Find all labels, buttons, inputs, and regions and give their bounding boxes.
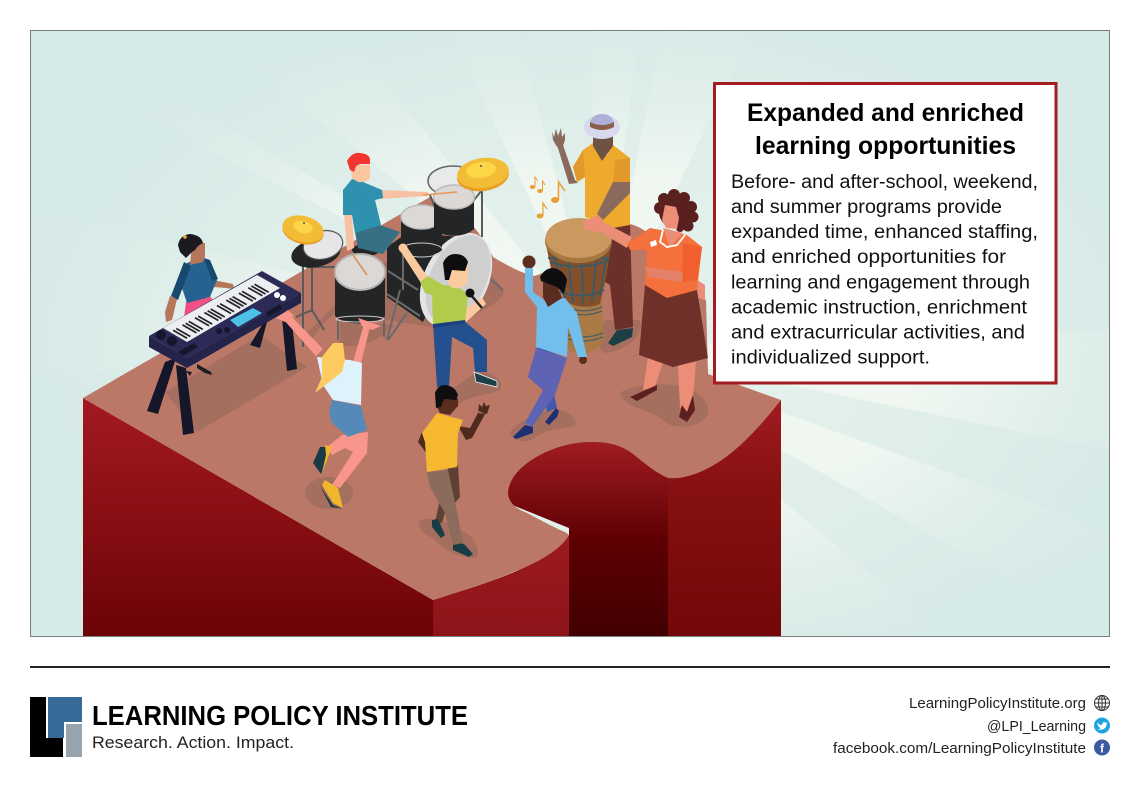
panel body text: academic instruction, enrichment [731, 298, 1028, 318]
front leg [525, 348, 567, 427]
hand [579, 356, 587, 364]
logo: Learning Policy Institute [30, 697, 468, 757]
hat band [590, 122, 614, 130]
back tom drum [428, 166, 478, 196]
hair [315, 343, 345, 393]
shirt [317, 357, 362, 405]
playing arm [597, 182, 630, 220]
bass drum head [405, 221, 507, 339]
stool [352, 244, 380, 256]
shirt [422, 413, 463, 472]
left cymbal [279, 211, 327, 249]
djembe drum [545, 218, 612, 354]
keyboard legs [147, 313, 297, 435]
shadow: dancing woman [305, 477, 353, 509]
face [190, 243, 205, 265]
back leg [435, 465, 460, 523]
scene frame [30, 30, 1110, 636]
hair [347, 153, 370, 172]
website: LearningPolicyInstitute.org [909, 695, 1086, 712]
keyboard player [165, 234, 234, 376]
shoes [432, 519, 473, 557]
landing shoe [320, 480, 343, 509]
platform top surface [83, 197, 781, 600]
music notes [530, 177, 565, 218]
drum stem [568, 300, 604, 354]
legs [327, 432, 368, 488]
panel body text: learning and engagement through [731, 272, 1030, 294]
hand [398, 244, 408, 252]
necklace [660, 230, 685, 247]
panel body text: and extracurricular activities, and [731, 322, 1025, 344]
snare drum [335, 254, 385, 340]
back notch [697, 352, 708, 374]
right arm [458, 402, 490, 440]
face [350, 165, 370, 182]
dancing woman [276, 310, 381, 509]
face [662, 205, 679, 229]
skirt [639, 285, 708, 367]
forearm [462, 297, 486, 322]
dials [156, 304, 282, 356]
singer [398, 244, 497, 387]
drummer [343, 153, 457, 256]
hair [178, 234, 203, 258]
left wall [83, 398, 433, 637]
scene panel: stage illustration background with light rays [0, 5, 1120, 642]
panel heading [747, 99, 1024, 160]
hand [552, 128, 565, 147]
icon: facebook: f [1100, 742, 1105, 756]
dancer in yellow shirt [418, 385, 490, 557]
shadow: drummer standing [599, 320, 641, 353]
hair [435, 385, 458, 408]
icon: globe [1094, 696, 1110, 710]
pants [355, 225, 400, 254]
keyboard top [149, 271, 301, 358]
pants [602, 224, 633, 330]
icon: facebook [1094, 740, 1110, 756]
bowl cords [548, 258, 609, 305]
panel body text: and summer programs provide [731, 197, 1002, 218]
logo mark [30, 697, 82, 757]
shoes [630, 385, 695, 422]
middle wall [433, 535, 569, 637]
face [543, 282, 562, 307]
drummer man [552, 114, 633, 346]
skirt [329, 400, 367, 437]
right forearm [213, 280, 234, 289]
teacher [583, 189, 708, 422]
extended arm [583, 215, 632, 248]
shadow: keyboard [165, 335, 307, 432]
drum kit [279, 155, 511, 347]
facebook page: facebook.com/LearningPolicyInstitute [833, 740, 1086, 757]
right cymbal stand [430, 188, 482, 237]
skirt [183, 297, 220, 325]
shirt [525, 268, 587, 357]
callout panel: expanded and enriched learning opportunities [714, 84, 1056, 383]
face [437, 398, 458, 415]
shadow: yellow shirt dancer [419, 519, 478, 558]
knobs [274, 292, 280, 298]
shadow: blue shirt dancer [510, 410, 576, 441]
footer rule [30, 666, 1110, 668]
shadow: singer [440, 372, 501, 408]
white keys [163, 275, 280, 342]
notch interior [500, 435, 668, 637]
icon: twitter [1094, 718, 1110, 734]
shoe [474, 372, 497, 387]
panel body text [731, 172, 1038, 368]
panel heading: Expanded and enriched [747, 99, 1024, 127]
hair [443, 254, 468, 280]
platform: red puzzle piece block [83, 197, 781, 637]
hands [276, 310, 381, 330]
note one [530, 177, 538, 189]
drum head [545, 218, 612, 263]
arms [283, 314, 370, 363]
belt [433, 320, 465, 328]
left forearm [165, 296, 177, 322]
left arm [418, 432, 444, 461]
bass drum shell [387, 233, 463, 322]
neck [663, 228, 683, 247]
sleeves [171, 258, 218, 300]
arm behind [693, 277, 705, 300]
shirt [573, 143, 630, 228]
sleeve [682, 243, 702, 282]
twitter handle: @LPI_Learning [987, 718, 1086, 735]
right tom drum [434, 185, 474, 236]
hair [540, 268, 567, 294]
left tom drum [289, 227, 346, 272]
panel body text: individualized support. [731, 348, 930, 368]
name tag [650, 240, 657, 247]
panel body text: Before- and after-school, weekend, [731, 172, 1038, 193]
keyboard side [149, 293, 301, 368]
shoes [513, 408, 559, 439]
shoe [608, 328, 633, 346]
note two [537, 181, 545, 193]
sleeve [573, 150, 630, 182]
right cymbal [455, 155, 511, 194]
mid tom drum [400, 205, 442, 257]
microphone [466, 288, 482, 308]
blouse [627, 228, 702, 298]
fist [522, 256, 536, 268]
panel body text: and enriched opportunities for [731, 247, 1007, 268]
sweater [181, 257, 217, 303]
shirt [343, 179, 383, 233]
hair [654, 189, 698, 232]
shirt [420, 276, 468, 325]
back leg [528, 347, 566, 412]
keyboard [147, 271, 301, 435]
raised arm [401, 246, 429, 283]
raised arm [557, 145, 578, 184]
drum stick lower [353, 255, 367, 275]
dancer in blue shirt [513, 256, 587, 439]
note three [551, 182, 565, 203]
logo name: LEARNING POLICY INSTITUTE [92, 700, 468, 731]
front leg [427, 470, 463, 545]
screen [230, 308, 262, 327]
note four [537, 203, 547, 218]
raised shoe [313, 445, 332, 474]
stem bands [568, 307, 603, 341]
hair tie [183, 235, 187, 239]
bass drum stands [387, 237, 503, 340]
left arm [344, 214, 354, 251]
floor shadows [165, 245, 708, 558]
neck and face [593, 135, 613, 161]
hat crown [590, 114, 614, 129]
drum stick upper [423, 192, 457, 195]
face [447, 265, 468, 288]
drum bowl [545, 240, 612, 307]
shoes [186, 364, 212, 376]
folded arm [645, 267, 683, 282]
tagline: Research. Action. Impact. [92, 733, 294, 752]
pants [433, 320, 487, 387]
panel heading: learning opportunities [755, 132, 1016, 160]
left cymbal stand [293, 240, 335, 347]
shadow: drum kit [300, 245, 503, 346]
right arm [381, 190, 428, 199]
hat brim [584, 115, 620, 139]
legs [643, 357, 696, 417]
black keys [173, 284, 269, 338]
panel body text: expanded time, enhanced staffing, [731, 222, 1038, 243]
right wall [668, 400, 781, 637]
shadow: teacher [620, 384, 708, 427]
contact links [833, 695, 1110, 757]
knob two [280, 295, 286, 301]
